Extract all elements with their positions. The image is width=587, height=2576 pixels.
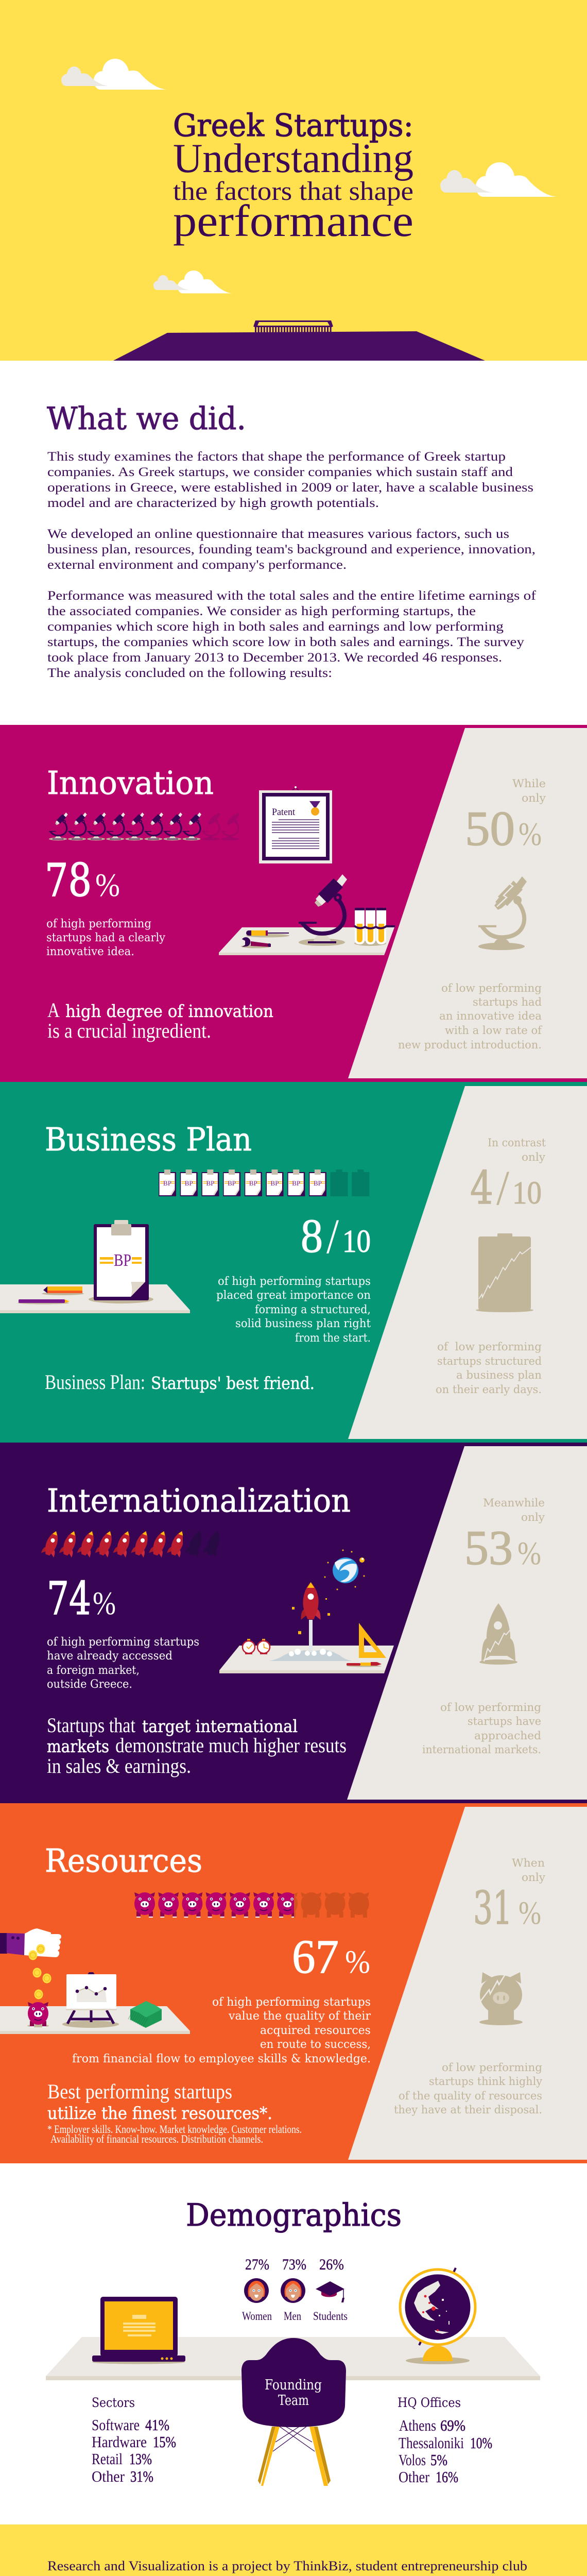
list: hq offices: 69% [440, 2416, 465, 2434]
stat: 53 percent [464, 1520, 541, 1575]
icon: wrench [241, 937, 271, 948]
icon: launching rocket [269, 1582, 352, 1661]
text: while only: While [512, 777, 546, 790]
list: hq offices: 10% [470, 2434, 492, 2452]
icon: screwdriver [246, 930, 289, 938]
text: high performers foreign market [47, 1636, 199, 1691]
text: meanwhile only [483, 1497, 545, 1523]
stat: 74 percent: % [93, 1585, 116, 1621]
icon: planet [333, 1557, 365, 1583]
heading: business plan: Business Plan [45, 1121, 252, 1158]
text: meanwhile only: Meanwhile [483, 1497, 545, 1509]
panel: innovation [0, 725, 587, 1082]
text: plan takeaway: Business Plan: [45, 1370, 145, 1394]
text: high performers plan: of high performing startups [218, 1275, 371, 1288]
stat: 78 percent: 78 [45, 854, 92, 907]
list: hq offices: Athens [399, 2416, 436, 2434]
list: sectors: Software [92, 2416, 140, 2434]
text: international takeaway: Startups that [47, 1714, 135, 1737]
list: sectors: Retail [92, 2450, 123, 2468]
list: hq offices: Other [399, 2468, 430, 2486]
icon: clipboard [89, 1220, 153, 1303]
list: sectors [92, 2395, 176, 2485]
text: low performers innovation: an innovative idea [439, 1010, 542, 1022]
text: low performers foreign: approached [474, 1730, 541, 1742]
text: innovation takeaway: is a crucial ingredient. [47, 1019, 211, 1042]
table [46, 2337, 540, 2380]
icon: gray clipboard [476, 1233, 533, 1312]
text: in contrast only: In contrast [488, 1137, 546, 1149]
list: sectors: Hardware [92, 2433, 147, 2451]
icon: broken gray pig [479, 1971, 523, 2025]
icon: stars and dots [292, 1550, 365, 1634]
icon: laptop [92, 2297, 185, 2364]
text: low performers innovation: with a low rate of [445, 1024, 543, 1037]
title: Greek Startups: [173, 108, 413, 144]
text: plan takeaway: Startups' best friend. [151, 1373, 315, 1393]
icon: orange pencil [42, 1286, 84, 1295]
stat: 4 of 10: 4 [470, 1161, 493, 1214]
text: high performers innovation: innovative idea. [46, 945, 134, 958]
text: high performers resources: from financial flow to employee skills & knowledge. [72, 2053, 371, 2065]
text: international takeaway: demonstrate much higher resuts [115, 1734, 347, 1757]
icon: patent frame: Patent [272, 807, 296, 818]
list: sectors: 15% [153, 2433, 176, 2451]
icon row: rockets 7.4 of 10 [41, 1531, 219, 1557]
text: low performers foreign: of low performing [440, 1701, 541, 1714]
text block: study description: external environment and company's performance. [47, 558, 347, 572]
stat: 4 of 10 [470, 1160, 542, 1215]
text: resources takeaway: Best performing startups [47, 2080, 232, 2103]
text: high performers resources: value the quality of their [228, 2010, 371, 2023]
stat: 67 percent [292, 1930, 370, 1984]
stat: 8 of 10: 10 [342, 1224, 371, 1259]
icon: gray rocket [479, 1603, 517, 1665]
stat: 78 percent: % [95, 867, 120, 903]
text: low performers innovation: startups had [473, 996, 542, 1008]
text: low performers innovation: new product introduction. [398, 1039, 542, 1051]
list: hq offices: HQ Offices [398, 2395, 461, 2410]
text: low performers foreign: startups have [468, 1715, 541, 1727]
panel: internationalization [0, 1443, 587, 1803]
text: meanwhile only: only [521, 1511, 545, 1523]
text: high performers plan: forming a structured, [255, 1303, 371, 1316]
panel: resources [0, 1803, 587, 2163]
panel: business plan [0, 1082, 587, 1443]
text: high performers foreign market: have already accessed [47, 1650, 172, 1663]
text: international takeaway: target international [142, 1716, 298, 1736]
icon: chair: Team [278, 2393, 309, 2409]
icon: pen [347, 1662, 382, 1667]
text: high performers plan: placed great importance on [216, 1289, 371, 1302]
text block: study description [47, 450, 537, 680]
text: high performers foreign market: a foreign market, [47, 1664, 140, 1677]
text: high performers resources [72, 1996, 371, 2065]
text: innovation takeaway [47, 998, 273, 1042]
text block: study description: companies. As Greek startups, we consider companies which sustain staff and [47, 465, 513, 479]
text block: study description: companies which score high in both sales and earnings and low performing [47, 620, 504, 634]
icon row: clipboards 8 of 10: BP [292, 1179, 300, 1187]
text block: study description: Performance was measured with the total sales and the entire lifetime earnings of [47, 589, 537, 603]
text: high performers foreign market: of high performing startups [47, 1636, 199, 1649]
text block: study description: startups, the companies which score low in both sales and earnings. The survey [47, 635, 525, 649]
stat: 53 percent: % [517, 1535, 541, 1571]
text: resources takeaway: Availability of financial resources. Distribution channels. [50, 2132, 263, 2145]
title [173, 108, 413, 246]
icon row: clipboards 8 of 10: BP [163, 1179, 171, 1187]
icon: money stack [130, 2001, 162, 2028]
text: low performers resources [394, 2061, 542, 2116]
text: plan takeaway [45, 1370, 315, 1394]
stat: 8 of 10 [301, 1209, 371, 1264]
text: low performers foreign: international markets. [422, 1743, 541, 1756]
icon: woman face [244, 2278, 269, 2303]
stat: 67 percent: 67 [292, 1930, 339, 1984]
panel: footer [0, 2524, 587, 2576]
icon: cloud right [440, 162, 557, 197]
list: hq offices: 5% [430, 2451, 447, 2469]
text block: study description: model and are characterized by high growth potentials. [47, 496, 379, 510]
stats: founders [242, 2256, 348, 2323]
stat: 31 percent: % [519, 1894, 541, 1931]
icon: purple pencil [18, 1299, 70, 1304]
list: sectors: 41% [145, 2416, 169, 2434]
text: high performers innovation [46, 918, 166, 958]
heading: demographics: Demographics [186, 2197, 402, 2233]
list: hq offices: Thessaloniki [399, 2434, 464, 2452]
icon: cloud top left [61, 59, 167, 90]
stat: 31 percent: 31 [473, 1882, 512, 1935]
icon: piggy bank [27, 2002, 49, 2027]
stat: 74 percent: 74 [47, 1572, 91, 1625]
stats: founders: Women [242, 2310, 272, 2323]
illustration: rocket launch table [219, 1550, 394, 1673]
icon row: pigs 6.7 of 10 [134, 1892, 369, 1918]
icon: chair [241, 2338, 346, 2486]
text: international takeaway [47, 1714, 347, 1777]
text: low performers plan: of low performing [437, 1341, 542, 1353]
stat: 4 of 10: 10 [512, 1176, 542, 1211]
text: low performers foreign [422, 1701, 541, 1756]
text: high performers resources: en route to success, [260, 2038, 371, 2051]
text block: project description: Research and Visualization is a project by ThinkBiz, student entrepreneurship club [47, 2558, 527, 2573]
title: performance [173, 196, 413, 246]
text block: study description: The analysis concluded on the following results: [47, 666, 332, 680]
stat: 50 percent: % [519, 816, 542, 852]
text: high performers innovation: startups had a clearly [46, 931, 166, 944]
panel: hero [0, 0, 587, 361]
stats: founders: Students [313, 2310, 348, 2323]
text: when only: only [522, 1871, 545, 1884]
stat: 53 percent: 53 [464, 1520, 513, 1575]
icon: chart easel [62, 1972, 119, 2028]
illustration: business plan table [0, 1220, 190, 1313]
stat: 8 of 10: / [326, 1209, 339, 1264]
title: the factors that shape [173, 177, 413, 206]
text block: study description: operations in Greece, were established in 2009 or later, have a scalable business [47, 481, 533, 495]
list: hq offices: 16% [436, 2468, 458, 2486]
text: low performers resources: of low performing [442, 2061, 542, 2074]
list: sectors: Sectors [92, 2395, 135, 2410]
heading: innovation: Innovation [47, 764, 214, 802]
icon row: clipboards 8 of 10: BP [228, 1179, 236, 1187]
icon row: microscopes 8 of 10 [49, 812, 239, 840]
text block: study description: the associated companies. We consider as high performing startups, the [47, 604, 476, 618]
text: resources takeaway [47, 2080, 302, 2145]
stats: founders: Men [284, 2310, 301, 2323]
text: low performers resources: startups think highly [429, 2075, 542, 2088]
text block: study description: This study examines the factors that shape the performance of Greek startup [47, 450, 506, 464]
heading: internationalization: Internationalization [47, 1482, 351, 1519]
icon: test tubes [354, 908, 395, 946]
illustration: resources table [0, 1928, 190, 2034]
text: resources takeaway: utilize the finest resources*. [47, 2103, 272, 2123]
stats: founders: 26% [319, 2256, 344, 2273]
text: while only: only [522, 792, 546, 804]
icon: globe with map of Greece [400, 2268, 475, 2364]
text: low performers plan [436, 1341, 542, 1396]
text: international takeaway: markets [47, 1736, 109, 1756]
illustration: lab table [219, 786, 395, 955]
text: high performers resources: of high performing startups [212, 1996, 371, 2009]
text: low performers plan: a business plan [456, 1369, 542, 1381]
heading: what we did: What we did. [47, 401, 246, 437]
list: hq offices: Volos [399, 2451, 426, 2469]
stats: founders: 27% [245, 2256, 269, 2273]
icon: alarm clocks [243, 1639, 270, 1654]
text: low performers plan: on their early days. [436, 1383, 542, 1396]
stat: 4 of 10: / [496, 1160, 509, 1215]
text: when only: When [512, 1857, 545, 1869]
heading: resources: Resources [45, 1842, 202, 1879]
text: high performers resources: acquired resources [260, 2024, 371, 2037]
stats: founders: 73% [282, 2256, 306, 2273]
icon: gray microscope [478, 876, 527, 950]
icon row: clipboards 8 of 10: BP [271, 1179, 279, 1187]
title: Understanding [173, 136, 413, 181]
icon: patent frame [259, 786, 332, 863]
text: international takeaway: in sales & earnings. [47, 1754, 191, 1777]
icon: microscope [299, 874, 347, 946]
text: in contrast only [488, 1137, 546, 1163]
text block: study description: We developed an online questionnaire that measures various factors, such us [47, 527, 509, 541]
text: high performers plan: solid business plan right [235, 1317, 371, 1330]
text: when only [512, 1857, 545, 1884]
text: while only [512, 777, 546, 804]
list: sectors: 13% [129, 2450, 152, 2468]
stat: 8 of 10: 8 [301, 1210, 323, 1263]
icon: cloud lower [153, 270, 232, 293]
text: innovation takeaway: A [47, 998, 60, 1022]
text: high performers innovation: of high performing [46, 918, 151, 930]
icon row: clipboards 8 of 10: BP [314, 1179, 322, 1187]
text: low performers innovation [398, 982, 543, 1051]
list: sectors: Other [92, 2467, 125, 2485]
text: high performers plan: from the start. [295, 1332, 371, 1345]
panel: demographics [0, 2163, 587, 2524]
icon row: clipboards 8 of 10 [159, 1170, 369, 1196]
text: in contrast only: only [522, 1151, 545, 1163]
list: sectors: 31% [130, 2467, 153, 2485]
text block: study description: business plan, resources, founding team's background and experience, innovation, [47, 543, 536, 556]
text: low performers plan: startups structured [437, 1355, 542, 1367]
icon: set square [359, 1623, 386, 1658]
icon: graduation cap [316, 2281, 344, 2302]
panel: what we did [0, 361, 587, 725]
text: low performers resources: of the quality of resources [399, 2090, 542, 2102]
text: low performers resources: they have at their disposal. [394, 2104, 542, 2116]
icon: hand dropping coins [0, 1928, 61, 1999]
text: low performers innovation: of low performing [441, 982, 542, 994]
text: resources takeaway: * Employer skills. Know-how. Market knowledge. Customer relations. [47, 2123, 302, 2136]
icon row: clipboards 8 of 10: BP [185, 1179, 193, 1187]
text: innovation takeaway: high degree of innovation [65, 1001, 273, 1021]
icon: man face [281, 2278, 305, 2303]
text: high performers foreign market: outside Greece. [47, 1678, 132, 1691]
icon: acropolis hill and parthenon [113, 320, 485, 361]
icon row: clipboards 8 of 10: BP [249, 1179, 257, 1187]
stat: 50 percent [465, 801, 542, 856]
text block: study description: took place from January 2013 to December 2013. We recorded 46 responses. [47, 651, 502, 665]
stat: 67 percent: % [345, 1943, 370, 1980]
stat: 50 percent: 50 [465, 801, 515, 856]
text: high performers plan [216, 1275, 371, 1345]
icon row: clipboards 8 of 10: BP [206, 1179, 214, 1187]
list: hq offices [398, 2395, 492, 2486]
icon: chair: Founding [265, 2377, 322, 2393]
icon: clipboard: BP [114, 1251, 131, 1270]
